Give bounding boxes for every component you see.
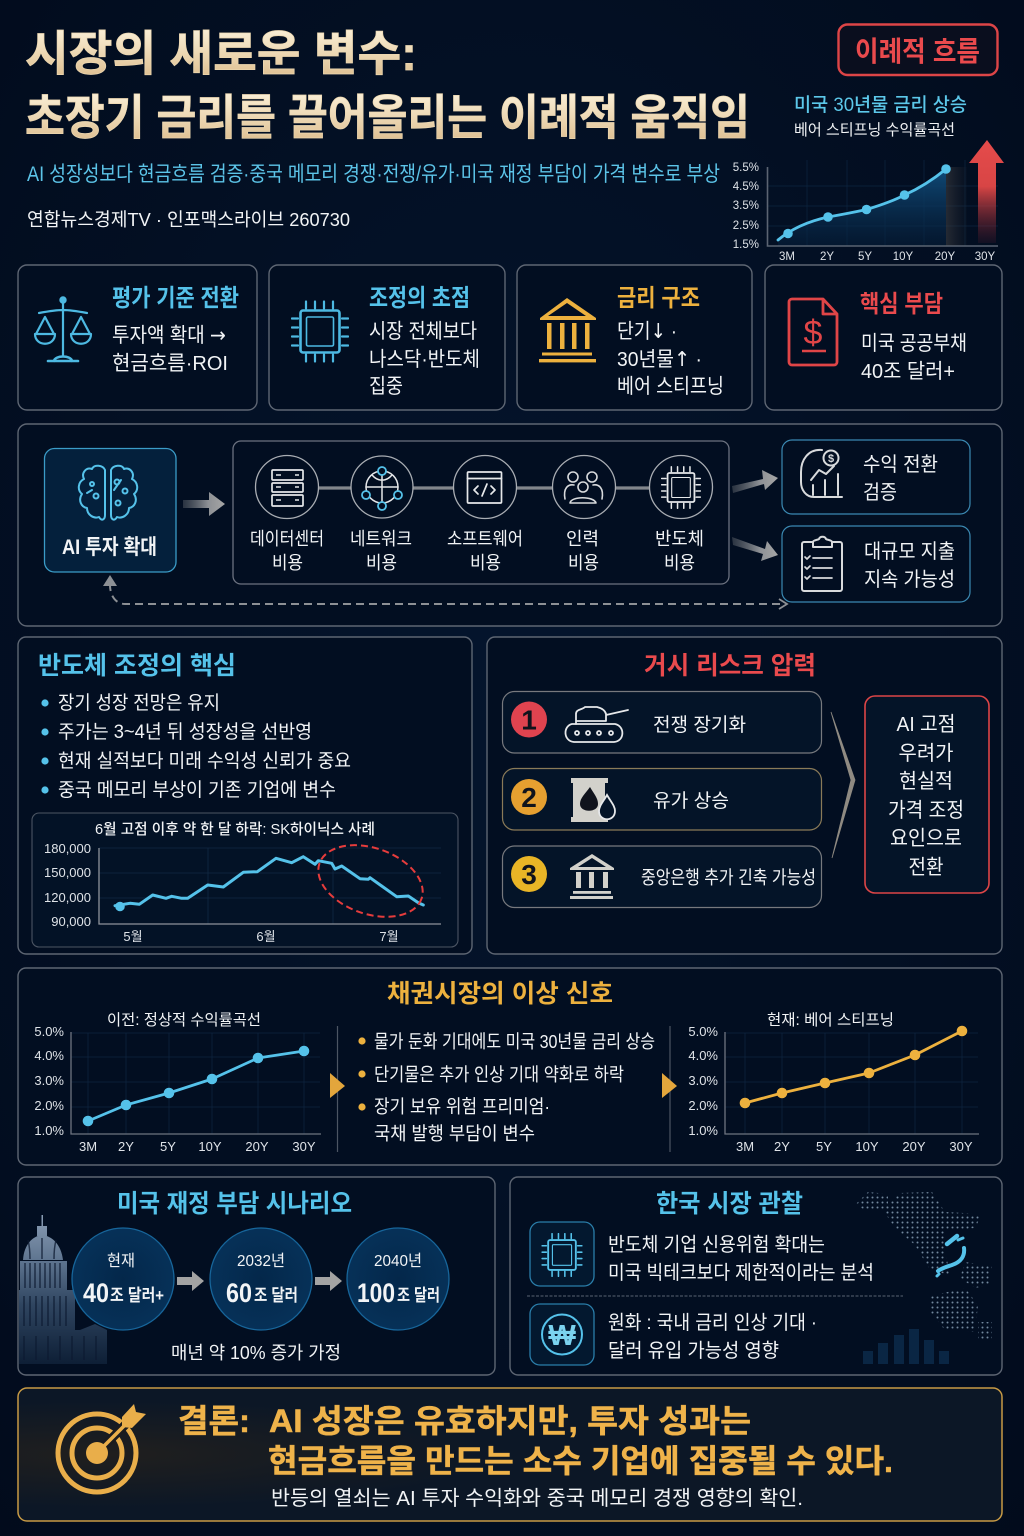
circle: 2040: 100 [357, 1278, 395, 1308]
chart: SK hynix decline: 7월 [379, 929, 399, 944]
arrow: to cost group [183, 492, 225, 516]
cost labels: 데이터센터 [250, 529, 324, 549]
chart: normal yield curve: 10Y [198, 1139, 222, 1154]
box text: 수익 전환 [863, 453, 938, 476]
box: AI peak concern: 현실적 [899, 770, 953, 793]
text: semiconductor credit risk: 미국 빅테크보다 제한적이라는 분석 [608, 1262, 874, 1284]
box: AI peak concern: 가격 조정 [888, 799, 964, 822]
chart: bear steepening: 10Y [855, 1139, 879, 1154]
box text [864, 540, 955, 591]
signal bullets: 물가 둔화 기대에도 미국 30년물 금리 상승 [374, 1031, 655, 1052]
card text [369, 320, 480, 398]
source line: 연합뉴스경제TV · 인포맥스라이브 260730 [27, 209, 350, 230]
card text: 30년물↑ · [617, 347, 702, 371]
chart: bear steepening: 2.0% [688, 1098, 718, 1113]
panel: correction focus [269, 265, 505, 410]
icon: won box [530, 1304, 594, 1365]
box text [863, 453, 938, 504]
subtitle: AI 성장성보다 현금흐름 검증·중국 메모리 경쟁·전쟁/유가·미국 재정 부담이 가격 변수로 부상 [27, 163, 720, 186]
panel heading: 거시 리스크 압력 [644, 652, 816, 680]
card text: 미국 공공부채 [861, 332, 967, 355]
chart: SK hynix decline: 180,000 [44, 841, 91, 856]
chart: normal yield curve: 2.0% [34, 1098, 64, 1113]
chart: normal yield curve: 30Y [292, 1139, 316, 1154]
conclusion headline [178, 1403, 893, 1479]
text: won outlook: 달러 유입 가능성 영향 [608, 1340, 779, 1362]
cost labels: 소프트웨어 [447, 529, 523, 549]
risk 2: oil: 유가 상승 [653, 790, 729, 812]
arrow: right gold [662, 1073, 677, 1098]
panel heading: 한국 시장 관찰 [656, 1190, 803, 1218]
risk 2: oil: 2 [521, 782, 537, 813]
chart: bear steepening: 5Y [816, 1139, 832, 1154]
arrow: left gold [330, 1073, 345, 1098]
badge: unusual flow [838, 24, 998, 75]
bullet list: 중국 메모리 부상이 기존 기업에 변수 [58, 779, 336, 801]
panel: Korean market watch [510, 1177, 1002, 1375]
chart: US 30-year yield rise: 10Y [893, 251, 914, 263]
chart: normal yield curve: 2Y [118, 1139, 134, 1154]
card text: 시장 전체보다 [369, 320, 477, 343]
risk 1: war: 전쟁 장기화 [653, 714, 746, 736]
card text: 단기↓ · [617, 319, 677, 343]
text: won outlook [608, 1312, 817, 1362]
bullet list: 주가는 3~4년 뒤 성장성을 선반영 [58, 721, 312, 743]
box: revenue conversion [782, 440, 970, 514]
icon: scales [35, 297, 91, 361]
box: revenue conversion: $ [828, 453, 834, 465]
card text: 집중 [369, 375, 403, 398]
arrow: to spending check [732, 537, 778, 561]
cost labels: 비용 [470, 553, 501, 573]
signal bullets: 단기물은 추가 인상 기대 약화로 하락 [374, 1064, 624, 1085]
chart: US 30-year yield rise: 2.5% [733, 220, 759, 232]
chart: normal yield curve: 1.0% [34, 1123, 64, 1138]
cost labels: 비용 [664, 553, 695, 573]
conclusion headline: 결론: [178, 1403, 250, 1439]
card heading: 핵심 부담 [860, 291, 943, 318]
circle: now: 조 달러+ [110, 1286, 164, 1305]
conclusion headline: AI 성장은 유효하지만, 투자 성과는 [269, 1403, 751, 1439]
card text [861, 332, 967, 383]
panel: rate structure [517, 265, 752, 410]
chart title: 6월 고점 이후 약 한 달 하락: SK하이닉스 사례 [95, 821, 375, 838]
chart: bear steepening [688, 1011, 979, 1154]
icon: oil barrel [571, 778, 615, 822]
text: won outlook: 원화 : 국내 금리 인상 기대 · [608, 1312, 817, 1334]
chart subheading: 베어 스티프닝 수익률곡선 [794, 121, 955, 139]
illustration: capitol [19, 1215, 107, 1364]
icon: won box: ₩ [548, 1320, 576, 1352]
chart: US 30-year yield rise: 3.5% [733, 200, 759, 212]
chart: US 30-year yield rise: 1.5% [733, 239, 759, 251]
card heading: 조정의 초점 [369, 285, 470, 312]
icon: brain [79, 466, 137, 520]
panel heading: 채권시장의 이상 신호 [387, 980, 613, 1008]
card heading: 평가 기준 전환 [112, 285, 239, 312]
risk 3: central bank [502, 846, 822, 908]
circle: 2032: 60 [226, 1278, 252, 1308]
arrow: to 2040 [315, 1271, 342, 1291]
circle: now: 40 [83, 1278, 109, 1308]
icon: revenue chart [801, 450, 842, 497]
card text: 현금흐름·ROI [112, 352, 228, 375]
chart: bear steepening: 2Y [774, 1139, 790, 1154]
cost labels: 인력 [566, 529, 599, 549]
icon: debt document: $ [804, 314, 823, 352]
risk 1: war [502, 692, 822, 753]
chart: bear steepening: 30Y [949, 1139, 973, 1154]
signal bullets [358, 1031, 655, 1144]
chart: SK hynix decline: 5월 [123, 929, 143, 944]
cost labels: 반도체 [655, 529, 704, 549]
chart: normal yield curve: 5Y [160, 1139, 176, 1154]
box: AI peak concern: 전환 [908, 856, 944, 879]
card text [617, 319, 724, 398]
panel: AI investment flow [18, 424, 1002, 626]
chart: bear steepening: 현재: 베어 스티프닝 [767, 1011, 894, 1029]
chart: bear steepening: 3.0% [688, 1073, 718, 1088]
icon: red up arrow [969, 140, 1004, 243]
chart: SK hynix decline [32, 813, 458, 947]
circle: 2040: 2040년 [374, 1252, 422, 1270]
chart: SK hynix decline: 6월 [256, 929, 276, 944]
box: AI peak concern: AI 고점 [896, 713, 956, 736]
text: semiconductor credit risk: 반도체 기업 신용위험 확대는 [608, 1234, 825, 1256]
box text: 검증 [863, 481, 897, 504]
box: sustained spending [782, 526, 970, 602]
text: semiconductor credit risk [608, 1234, 874, 1284]
box text: 대규모 지출 [864, 540, 955, 563]
panel: macro risk pressure [487, 637, 1002, 954]
icon: people [565, 472, 602, 503]
chart: US 30-year yield rise [733, 94, 1004, 263]
chart: normal yield curve: 3M [79, 1139, 97, 1154]
card text [112, 323, 228, 375]
conclusion note: 반등의 열쇠는 AI 투자 수익화와 중국 메모리 경쟁 영향의 확인. [271, 1487, 803, 1510]
cost labels: 네트워크 [350, 529, 412, 549]
panel heading: 미국 재정 부담 시나리오 [117, 1190, 352, 1218]
bullet list: 현재 실적보다 미래 수익성 신뢰가 중요 [58, 750, 351, 772]
icon: chip [291, 300, 349, 362]
circle: 2040: 조 달러 [397, 1286, 440, 1305]
icon: checklist [802, 537, 842, 591]
icon: target with arrow [58, 1404, 146, 1492]
icon: network [362, 467, 402, 510]
panel: US fiscal scenario [18, 1177, 495, 1375]
arrow: to 2032 [177, 1271, 204, 1291]
bullet list [41, 692, 351, 801]
badge: unusual flow: 이례적 흐름 [855, 36, 980, 67]
cost labels: 비용 [272, 553, 303, 573]
box text: 지속 가능성 [864, 568, 955, 591]
box: cost items [233, 441, 729, 584]
card text: 투자액 확대 → [112, 323, 226, 347]
icon: software [468, 472, 502, 503]
circle: 2032: 2032년 [237, 1252, 285, 1270]
illustration: dot map [855, 1192, 992, 1340]
panel: semiconductor correction [18, 637, 472, 954]
title: 초장기 금리를 끌어올리는 이례적 움직임 [25, 92, 750, 145]
icon: data center [272, 470, 303, 506]
chart: US 30-year yield rise: 20Y [935, 251, 956, 263]
chart: normal yield curve [34, 1011, 321, 1154]
chart: US 30-year yield rise: 5.5% [733, 162, 759, 174]
card text: 나스닥·반도체 [369, 348, 480, 371]
circle: 2032 [210, 1228, 312, 1330]
chart: bear steepening: 1.0% [688, 1123, 718, 1138]
risk 2: oil [502, 768, 822, 830]
chart: SK hynix decline: 90,000 [51, 914, 91, 929]
chart: US 30-year yield rise: 5Y [858, 251, 872, 263]
arrow: to revenue check [732, 470, 778, 493]
circle: now: 현재 [107, 1252, 135, 1270]
chart: normal yield curve: 20Y [245, 1139, 269, 1154]
chart: bear steepening: 5.0% [688, 1024, 718, 1039]
chart: normal yield curve: 이전: 정상적 수익률곡선 [107, 1011, 261, 1029]
signal bullets: 국채 발행 부담이 변수 [374, 1123, 535, 1144]
chart: US 30-year yield rise: 2Y [820, 251, 834, 263]
card text: 40조 달러+ [861, 360, 955, 383]
chart: bear steepening: 4.0% [688, 1048, 718, 1063]
chart: US 30-year yield rise: 4.5% [733, 181, 759, 193]
icon: tank [565, 707, 628, 742]
icon: chip box [530, 1222, 594, 1286]
risk 3: central bank: 중앙은행 추가 긴축 가능성 [641, 867, 816, 888]
panel: bond market anomaly [18, 968, 1002, 1165]
title: 시장의 새로운 변수: [25, 28, 417, 81]
chart heading: 미국 30년물 금리 상승 [794, 94, 967, 116]
signal bullets: 장기 보유 위험 프리미엄· [374, 1096, 550, 1117]
circle: 2032: 조 달러 [254, 1286, 298, 1305]
arrow: dashed feedback loop [103, 575, 787, 609]
chart: normal yield curve: 5.0% [34, 1024, 64, 1039]
box: AI peak concern: 우려가 [898, 742, 954, 765]
icon: central bank [570, 854, 614, 899]
box: AI peak concern: 요인으로 [890, 827, 962, 850]
icon: semiconductor [661, 466, 701, 509]
panel: valuation shift [18, 265, 257, 410]
box: AI peak concern [865, 696, 989, 893]
box: AI investment expansion [44, 448, 176, 572]
cost labels: 비용 [366, 553, 397, 573]
chart: SK hynix decline: 150,000 [44, 865, 91, 880]
cost labels: 비용 [568, 553, 599, 573]
chart: SK hynix decline: 120,000 [44, 890, 91, 905]
risk 3: central bank: 3 [521, 859, 537, 890]
chart: bear steepening: 20Y [902, 1139, 926, 1154]
card heading: 금리 구조 [617, 285, 700, 312]
assumption note: 매년 약 10% 증가 가정 [171, 1343, 341, 1363]
decorative capitol columns [24, 1238, 96, 1360]
chart: bear steepening: 3M [736, 1139, 754, 1154]
risk 1: war: 1 [521, 704, 537, 736]
conclusion headline: 현금흐름을 만드는 소수 기업에 집중될 수 있다. [268, 1443, 893, 1479]
chart: normal yield curve: 4.0% [34, 1048, 64, 1063]
panel: conclusion [18, 1388, 1002, 1521]
chart: US 30-year yield rise: 30Y [975, 251, 996, 263]
title [25, 28, 750, 145]
circle: now [72, 1228, 174, 1330]
bullet list: 장기 성장 전망은 유지 [58, 692, 220, 714]
circle: 2040 [347, 1228, 449, 1330]
illustration: faded bars [863, 1329, 949, 1364]
box label: AI 투자 확대 [62, 536, 157, 559]
chart: normal yield curve: 3.0% [34, 1073, 64, 1088]
panel: core burden [765, 265, 1002, 410]
arrow: risks converge [831, 712, 855, 858]
cost labels [250, 529, 704, 573]
card text: 베어 스티프닝 [617, 375, 724, 398]
icon: debt document [789, 299, 837, 365]
panel heading: 반도체 조정의 핵심 [38, 652, 236, 680]
chart: US 30-year yield rise: 3M [779, 251, 795, 263]
icon: bank gold [539, 298, 596, 362]
